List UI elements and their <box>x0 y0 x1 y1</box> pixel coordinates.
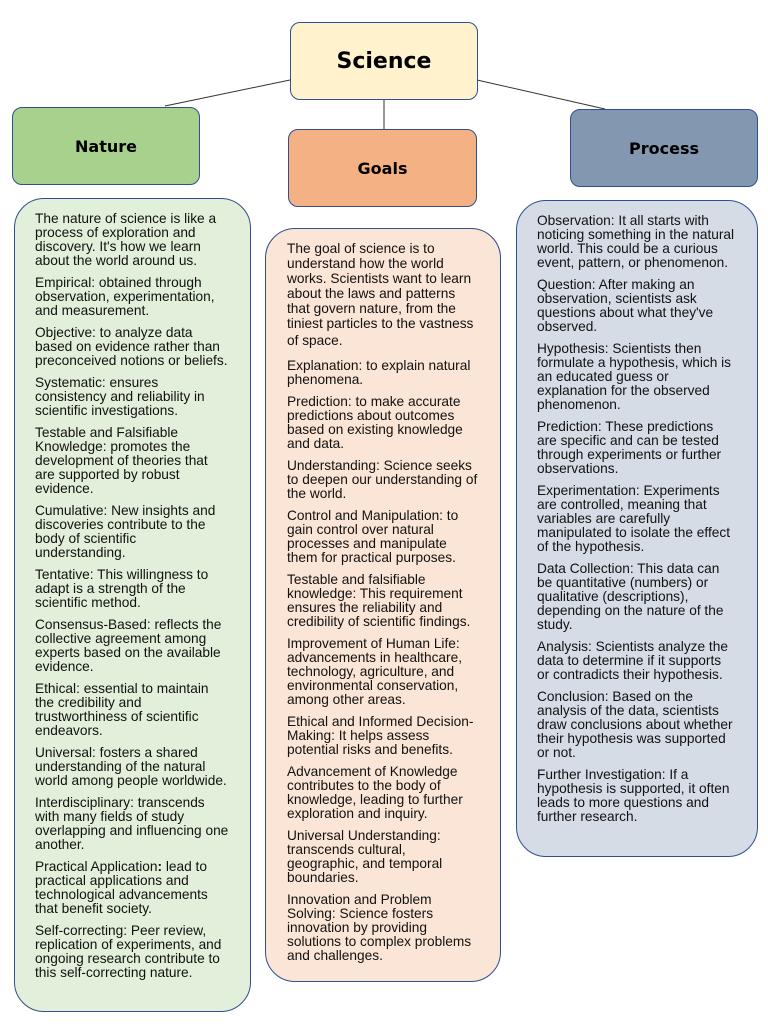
text: nature: Practical Application: lead to <box>35 859 207 874</box>
text: process: Conclusion: Based on the <box>537 689 693 704</box>
text: goals: Advancement of Knowledge <box>287 764 457 779</box>
text: nature: preconceived notions or beliefs. <box>35 353 228 368</box>
text: nature: observation, experimentation, <box>35 289 215 304</box>
text: goals: Prediction: to make accurate <box>287 394 460 409</box>
text: nature: Universal: fosters a shared <box>35 745 198 760</box>
text: nature <box>35 211 228 980</box>
text: nature: discovery. It's how we learn <box>35 239 201 254</box>
text: process: Further Investigation: If a <box>537 767 688 782</box>
text: goals: The goal of science is to <box>287 241 435 256</box>
text: nature: adapt is a strength of the <box>35 581 186 596</box>
text: nature: trustworthiness of scientific <box>35 709 199 724</box>
heading: Process: Process <box>629 138 699 158</box>
text: goals: boundaries. <box>287 870 359 885</box>
text: process: hypothesis is supported, it often <box>537 781 730 796</box>
text: goals: and data. <box>287 436 344 451</box>
text: process: are specific and can be tested <box>537 433 719 448</box>
text: nature: Self-correcting: Peer review, <box>35 923 206 938</box>
text: nature: body of scientific <box>35 531 136 546</box>
text: goals: to deepen our understanding of <box>287 472 477 487</box>
text: process: Question: After making an <box>537 277 694 292</box>
text: process: an educated guess or <box>537 369 669 384</box>
text: process: observation, scientists ask <box>537 291 697 306</box>
text: goals: among other areas. <box>287 692 406 707</box>
text: nature: process of exploration and <box>35 225 196 240</box>
text: process: further research. <box>537 809 637 824</box>
text: process: world. This could be a curious <box>537 241 718 256</box>
text: nature: scientific investigations. <box>35 403 178 418</box>
text: nature: based on evidence rather than <box>35 339 220 354</box>
text: process: of the hypothesis. <box>537 539 644 554</box>
text: goals: Testable and falsifiable <box>287 572 425 587</box>
text: goals: Innovation and Problem <box>287 892 432 907</box>
text: process: Analysis: Scientists analyze the <box>537 639 728 654</box>
text: nature: discoveries contribute to the <box>35 517 205 532</box>
text: goals: that govern nature, from the <box>287 301 456 316</box>
text: nature: practical applications and <box>35 873 189 888</box>
text: goals: Ethical and Informed Decision- <box>287 714 473 729</box>
text: process: their hypothesis was supported <box>537 731 726 746</box>
heading: Process <box>570 109 758 187</box>
panel: process <box>516 200 758 857</box>
text: nature: are supported by robust <box>35 467 180 482</box>
text: nature: Consensus-Based: reflects the <box>35 617 221 632</box>
text: nature: evidence. <box>35 481 94 496</box>
text: nature: with many fields of study <box>35 809 184 824</box>
text: goals: Control and Manipulation: to <box>287 508 458 523</box>
text: process: Experimentation: Experiments <box>537 483 720 498</box>
text: process: variables are carefully <box>537 511 670 526</box>
text: nature: Objective: to analyze data <box>35 325 192 340</box>
text: nature: world among people worldwide. <box>35 773 227 788</box>
text: goals: understand how the world <box>287 256 444 271</box>
text: process: analysis of the data, scientists <box>537 703 719 718</box>
text: goals <box>287 241 478 963</box>
panel: nature <box>14 198 251 1012</box>
text: goals: Solving: Science fosters <box>287 906 433 921</box>
text: goals: Understanding: Science seeks <box>287 458 472 473</box>
text: goals: Making: It helps assess <box>287 728 429 743</box>
text: process: noticing something in the natural <box>537 227 734 242</box>
text: process: be quantitative (numbers) or <box>537 575 708 590</box>
text: process: qualitative (descriptions), <box>537 589 688 604</box>
text: nature: evidence. <box>35 659 94 674</box>
text: goals: knowledge: This requirement <box>287 586 462 601</box>
text: process: Prediction: These predictions <box>537 419 713 434</box>
text: nature: understanding. <box>35 545 126 560</box>
text: goals: of space. <box>287 333 343 348</box>
text: goals: knowledge, leading to further <box>287 792 463 807</box>
text: nature: experts based on the available <box>35 645 221 660</box>
text: nature: technological advancements <box>35 887 208 902</box>
text: nature: consistency and reliability in <box>35 389 205 404</box>
text: process: study. <box>537 617 573 632</box>
text: process: through experiments or further <box>537 447 721 462</box>
text: goals: environmental conservation, <box>287 678 458 693</box>
text: goals: tiniest particles to the vastness <box>287 316 473 331</box>
text: process: draw conclusions about whether <box>537 717 733 732</box>
text: goals: Universal Understanding: <box>287 828 441 843</box>
text: process: observations. <box>537 461 618 476</box>
text: process: manipulated to isolate the effect <box>537 525 730 540</box>
text: nature: that benefit society. <box>35 901 152 916</box>
text: nature: scientific method. <box>35 595 141 610</box>
text: goals: Improvement of Human Life: <box>287 636 460 651</box>
text: process: explanation for the observed <box>537 383 710 398</box>
text: goals: Explanation: to explain natural <box>287 358 470 373</box>
text: goals: exploration and inquiry. <box>287 806 428 821</box>
text: nature: ongoing research contribute to <box>35 951 220 966</box>
panel: goals <box>265 228 501 982</box>
text: goals: them for practical purposes. <box>287 550 456 565</box>
text: process: Hypothesis: Scientists then <box>537 341 701 356</box>
text: nature: Ethical: essential to maintain <box>35 681 208 696</box>
text: goals: contributes to the body of <box>287 778 441 793</box>
text: goals: solutions to complex problems <box>287 934 471 949</box>
title: Science <box>290 22 478 100</box>
text: goals: predictions about outcomes <box>287 408 454 423</box>
text: nature: Knowledge: promotes the <box>35 439 190 454</box>
text: nature: Systematic: ensures <box>35 375 158 390</box>
text: nature: overlapping and influencing one <box>35 823 228 838</box>
text: process: phenomenon. <box>537 397 621 412</box>
text: process: depending on the nature of the <box>537 603 723 618</box>
heading: Goals: Goals <box>358 158 407 178</box>
text: nature: endeavors. <box>35 723 103 738</box>
heading: Nature <box>12 107 200 185</box>
text: process: leads to more questions and <box>537 795 709 810</box>
text: process: or not. <box>537 745 576 760</box>
text: goals: potential risks and benefits. <box>287 742 453 757</box>
text: goals: gain control over natural <box>287 522 434 537</box>
text: nature: and measurement. <box>35 303 149 318</box>
text: process: Observation: It all starts with <box>537 213 709 228</box>
text: nature: understanding of the natural <box>35 759 205 774</box>
text: process: questions about what they've <box>537 305 713 320</box>
text: goals: credibility of scientific findings. <box>287 614 470 629</box>
text: goals: ensures the reliability and <box>287 600 442 615</box>
text: goals: works. Scientists want to learn <box>287 271 471 286</box>
text: nature: The nature of science is like a <box>35 211 216 226</box>
text: goals: advancements in healthcare, <box>287 650 462 665</box>
text: process: event, pattern, or phenomenon. <box>537 255 728 270</box>
text: goals: and challenges. <box>287 948 383 963</box>
text: goals: the world. <box>287 486 346 501</box>
text: nature: Empirical: obtained through <box>35 275 202 290</box>
text: nature: development of theories that <box>35 453 208 468</box>
text: process: Data Collection: This data can <box>537 561 719 576</box>
heading: Goals <box>288 129 477 207</box>
text: nature: Interdisciplinary: transcends <box>35 795 205 810</box>
text: process: formulate a hypothesis, which is <box>537 355 731 370</box>
text: nature: collective agreement among <box>35 631 206 646</box>
text: goals: transcends cultural, <box>287 842 406 857</box>
text: goals: phenomena. <box>287 372 363 387</box>
text: nature: this self-correcting nature. <box>35 965 192 980</box>
text: nature: the credibility and <box>35 695 142 710</box>
text: goals: technology, agriculture, and <box>287 664 454 679</box>
text: process: data to determine if it supports <box>537 653 721 668</box>
text: goals: based on existing knowledge <box>287 422 463 437</box>
title: Science: Science <box>336 48 431 74</box>
text: goals: innovation by providing <box>287 920 427 935</box>
text: goals: processes and manipulate <box>287 536 447 551</box>
text: nature: replication of experiments, and <box>35 937 221 952</box>
text: nature: Cumulative: New insights and <box>35 503 215 518</box>
text: nature: another. <box>35 837 84 852</box>
text: process: are controlled, meaning that <box>537 497 707 512</box>
text: process <box>537 213 734 824</box>
text: nature: about the world around us. <box>35 253 197 268</box>
text: nature: Tentative: This willingness to <box>35 567 208 582</box>
heading: Nature: Nature <box>75 136 137 156</box>
text: process: observed. <box>537 319 597 334</box>
text: nature: Testable and Falsifiable <box>35 425 178 440</box>
text: goals: geographic, and temporal <box>287 856 442 871</box>
text: goals: about the laws and patterns <box>287 286 455 301</box>
text: process: or contradicts their hypothesis. <box>537 667 723 682</box>
